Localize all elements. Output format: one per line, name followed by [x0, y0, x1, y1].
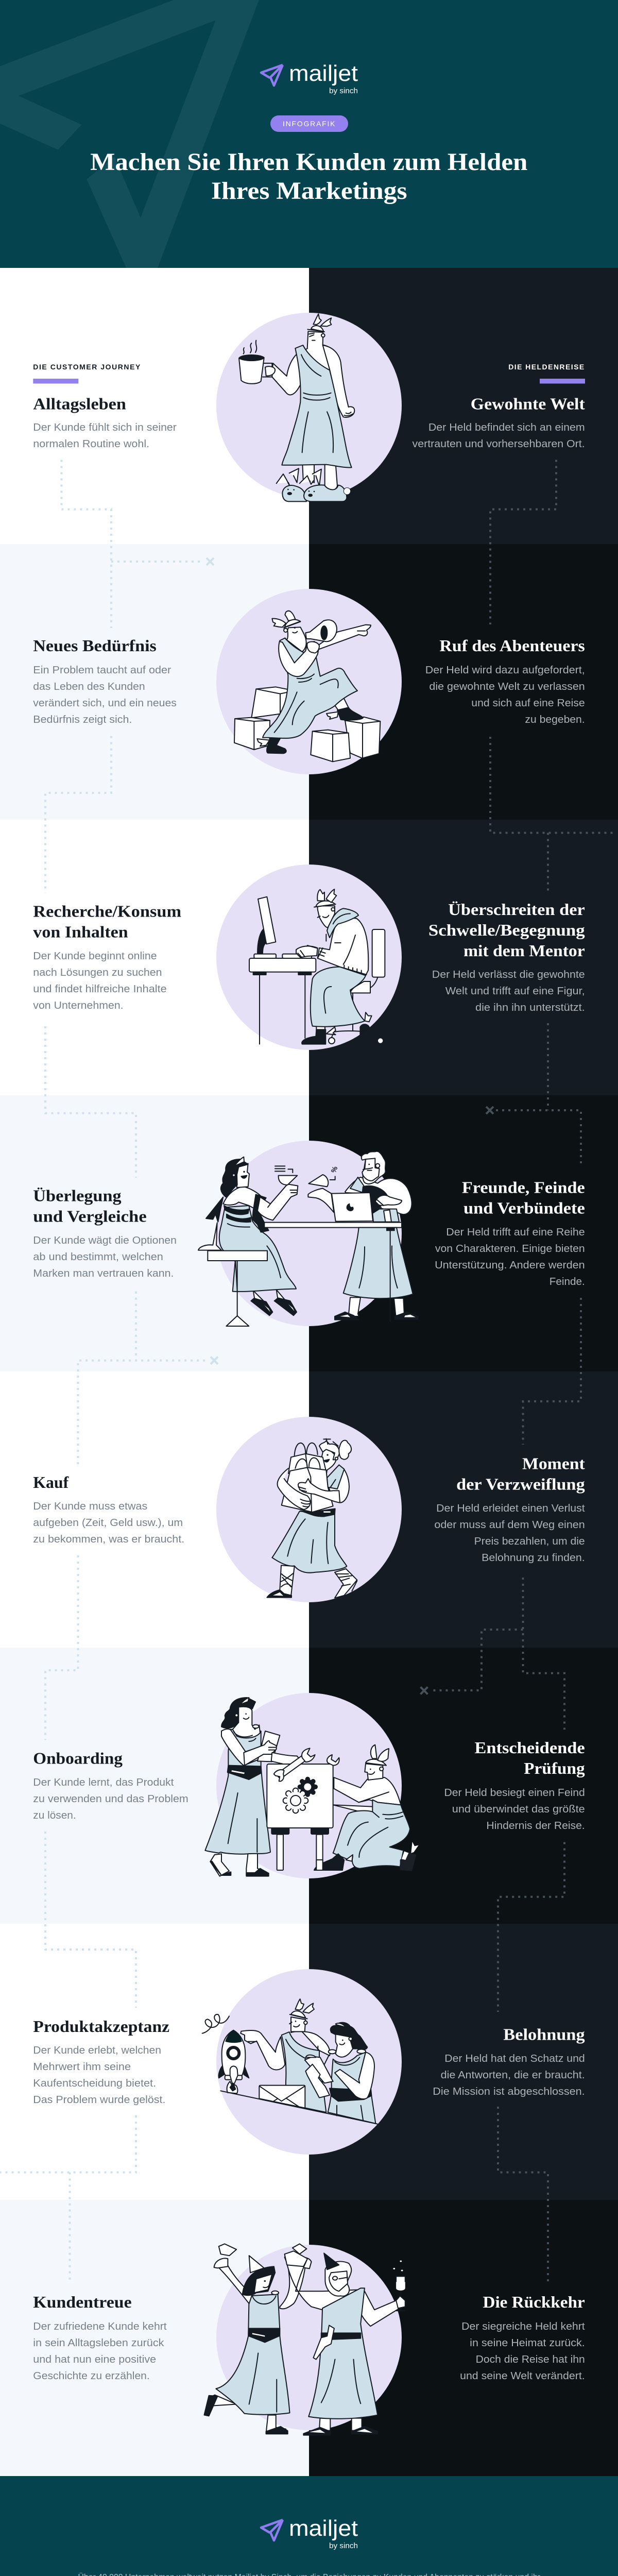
text: Produktakzeptanz: Mehrwert ihm seine [33, 2061, 131, 2073]
text: Überschreiten der Schwelle: Der Held verlässt die gewohnte [432, 969, 585, 980]
text: Ruf des Abenteuers [425, 636, 585, 725]
text: Die Rückkehr: Die Rückkehr [483, 2293, 585, 2311]
text: Neues Bedürfnis [33, 636, 177, 725]
text: Freunde, Feinde und Verbündete [435, 1178, 585, 1287]
text: Moment der Verzweiflung: der Verzweiflung [456, 1475, 585, 1493]
text: Überschreiten der Schwelle [428, 900, 585, 1013]
title: Machen Sie Ihren Kunden zum Helden [90, 148, 527, 176]
text: Produktakzeptanz: Produktakzeptanz [33, 2017, 169, 2036]
footer logo: mailjet [289, 2516, 358, 2541]
column label and accent bar: customer journey [33, 363, 141, 383]
text: Onboarding: zu verwenden und das Problem [33, 1793, 188, 1805]
icon: rocket [219, 2030, 249, 2093]
icon: wrench [274, 1748, 315, 1781]
text: Die Rückkehr: und seine Welt verändert. [460, 2370, 585, 2382]
text: Belohnung: Die Mission ist abgeschlossen. [433, 2086, 585, 2097]
dotted journey path: customer side [0, 460, 218, 2280]
text: Überlegung und Vergleiche: ab und bestimmt, welchen [33, 1251, 163, 1263]
text: Onboarding: Onboarding [33, 1749, 123, 1767]
footer panel [0, 2476, 618, 2576]
text: Freunde, Feinde und Verbündete: und Verbündete [464, 1198, 585, 1217]
text: Die Rückkehr: Doch die Reise hat ihn [476, 2354, 585, 2365]
text: Überlegung und Vergleiche: Der Kunde wägt die Optionen [33, 1235, 177, 1246]
text: Gewohnte Welt: Der Held befindet sich an einem [428, 422, 585, 433]
text: Recherche/Konsum von Inhalten: nach Lösungen zu suchen [33, 967, 162, 978]
text: Freunde, Feinde und Verbündete: von Charakteren. Einige bieten [435, 1243, 585, 1255]
text: Moment der Verzweiflung: Preis bezahlen, um die [474, 1536, 585, 1547]
text: Überschreiten der Schwelle: Schwelle/Begegnung [428, 921, 585, 939]
text: Ruf des Abenteuers: Ruf des Abenteuers [439, 636, 585, 655]
text: Recherche/Konsum von Inhalten: Der Kunde beginnt online [33, 951, 157, 962]
text: Neues Bedürfnis: Bedürfnis zeigt sich. [33, 714, 132, 725]
illustration: customer and hero fixing a machine [205, 1698, 419, 1876]
text: Überlegung und Vergleiche [33, 1186, 177, 1279]
text: Moment der Verzweiflung: Moment [522, 1454, 585, 1472]
header panel [0, 0, 618, 268]
text: Überlegung und Vergleiche: und Vergleiche [33, 1207, 147, 1225]
footer logo [261, 2516, 358, 2550]
text: Moment der Verzweiflung [434, 1454, 585, 1564]
icon: envelope [259, 2086, 305, 2108]
text: Überlegung und Vergleiche: Marken man vertrauen kann. [33, 1268, 174, 1279]
icon: squiggle [202, 2014, 229, 2033]
text: Ruf des Abenteuers: zu begeben. [525, 714, 585, 725]
illustration: customer and hero with rocket and envelope [202, 1999, 377, 2124]
text: Belohnung: Der Held hat den Schatz und [444, 2053, 585, 2064]
illustration: customer carrying shopping bags [267, 1439, 357, 1598]
decorative paper plane background [0, 0, 259, 268]
text: Recherche/Konsum von Inhalten [33, 902, 181, 1011]
panel: step 1 Alltagsleben / Gewohnte Welt [33, 363, 585, 450]
text: Freunde, Feinde und Verbündete: Der Held trifft auf eine Reihe [446, 1227, 585, 1238]
text: Entscheidende Prüfung: Prüfung [524, 1759, 585, 1777]
text: Entscheidende Prüfung: Der Held besiegt einen Feind [444, 1787, 585, 1799]
text: Überschreiten der Schwelle: die ihn ihn unterstützt. [475, 1002, 585, 1013]
text: Kauf [33, 1473, 184, 1545]
logo: mailjet by sinch: by sinch [329, 87, 358, 95]
circle backdrops [216, 313, 402, 2430]
title [90, 148, 527, 205]
text: Moment der Verzweiflung: Belohnung zu finden. [482, 1552, 585, 1564]
text: Recherche/Konsum von Inhalten: von Unternehmen. [33, 1000, 124, 1011]
text: Onboarding: zu lösen. [33, 1810, 76, 1821]
text: Belohnung: die Antworten, die er braucht. [441, 2070, 585, 2081]
title: Ihres Marketings [211, 177, 407, 205]
text: Alltagsleben: Alltagsleben [33, 395, 126, 413]
text: Freunde, Feinde und Verbündete: Unterstützung. Andere werden [435, 1260, 585, 1271]
text: Entscheidende Prüfung: und überwindet das größte [452, 1804, 585, 1815]
text: Recherche/Konsum von Inhalten: und findet hilfreiche Inhalte [33, 984, 167, 995]
text: Alltagsleben: normalen Routine wohl. [33, 438, 149, 450]
text: Neues Bedürfnis: Neues Bedürfnis [33, 636, 157, 655]
column label and accent bar: customer journey: DIE CUSTOMER JOURNEY [33, 363, 141, 371]
text: Produktakzeptanz: Das Problem wurde gelöst. [33, 2094, 165, 2106]
text: Kundentreue: Geschichte zu erzählen. [33, 2370, 150, 2382]
text: Produktakzeptanz [33, 2017, 169, 2106]
text: Recherche/Konsum von Inhalten: Recherche/Konsum [33, 902, 181, 920]
text: Produktakzeptanz: Kaufentscheidung bietet. [33, 2078, 156, 2089]
text: Entscheidende Prüfung: Entscheidende [474, 1738, 585, 1757]
text: Kauf: Der Kunde muss etwas [33, 1501, 147, 1512]
text: Freunde, Feinde und Verbündete: Feinde. [550, 1276, 585, 1287]
text: Kundentreue: Kundentreue [33, 2293, 132, 2311]
woman [204, 2244, 312, 2434]
text: Moment der Verzweiflung: Der Held erleidet einen Verlust [436, 1503, 585, 1514]
text: Onboarding [33, 1749, 188, 1821]
illustration: hero with megaphone on boxes [234, 611, 380, 761]
footer logo: by sinch [329, 2541, 358, 2550]
text: Alltagsleben: Der Kunde fühlt sich in seiner [33, 422, 177, 433]
text: Die Rückkehr [460, 2293, 585, 2382]
text: Ruf des Abenteuers: und sich auf eine Reise [471, 698, 585, 709]
column label and accent bar: hero's journey [508, 363, 585, 383]
logo: mailjet by sinch: mailjet [289, 61, 358, 86]
illustration: customer and hero at a bar table with laptop: % [329, 1165, 339, 1174]
text: Die Rückkehr: Der siegreiche Held kehrt [461, 2321, 585, 2332]
text: Belohnung [433, 2025, 585, 2097]
text: Kundentreue: und hat nun eine positive [33, 2354, 156, 2365]
text: Überschreiten der Schwelle: mit dem Mentor [464, 941, 585, 960]
text: Ruf des Abenteuers: Der Held wird dazu aufgefordert, [425, 665, 585, 676]
badge: Infografik [270, 115, 348, 132]
text: Produktakzeptanz: Der Kunde erlebt, welchen [33, 2045, 161, 2056]
text: Kundentreue: in sein Alltagsleben zurück [33, 2337, 164, 2349]
icon: gears [283, 1777, 318, 1813]
text: Neues Bedürfnis: das Leben des Kunden [33, 681, 145, 692]
text: Gewohnte Welt: Gewohnte Welt [471, 395, 585, 413]
text: Kauf: Kauf [33, 1473, 69, 1492]
text: Entscheidende Prüfung [444, 1738, 585, 1832]
illustration: hero with coffee cup and bunny slippers [239, 314, 354, 501]
text: Freunde, Feinde und Verbündete: Freunde, Feinde [462, 1178, 585, 1196]
dotted journey path: hero side [420, 460, 613, 2282]
illustration: customer and hero celebrating [204, 2244, 405, 2435]
text: Neues Bedürfnis: verändert sich, und ein neues [33, 698, 177, 709]
text: Gewohnte Welt: vertrauten und vorhersehbaren Ort. [412, 438, 585, 450]
illustration: customer and hero at a bar table with laptop [198, 1151, 418, 1326]
text: Kundentreue: Der zufriedene Kunde kehrt [33, 2321, 167, 2332]
text: Überschreiten der Schwelle: Überschreiten der [448, 900, 585, 919]
text: Kundentreue [33, 2293, 167, 2382]
text: Überschreiten der Schwelle: Welt und trifft auf eine Figur, [445, 986, 585, 997]
illustration: hero typing at a desk [249, 889, 385, 1044]
text: Gewohnte Welt [412, 395, 585, 450]
column label and accent bar: hero's journey: DIE HELDENREISE [508, 363, 584, 371]
badge: Infografik: INFOGRAFIK [283, 120, 335, 128]
text: Neues Bedürfnis: Ein Problem taucht auf oder [33, 665, 171, 676]
text: Kauf: aufgeben (Zeit, Geld usw.), um [33, 1517, 183, 1529]
text: Entscheidende Prüfung: Hindernis der Reise. [486, 1820, 585, 1832]
text: Belohnung: Belohnung [503, 2025, 585, 2043]
text: Alltagsleben [33, 395, 177, 450]
text: Ruf des Abenteuers: die gewohnte Welt zu verlassen [429, 681, 585, 692]
man [285, 2251, 405, 2435]
text: Überlegung und Vergleiche: Überlegung [33, 1186, 122, 1205]
text: Kauf: zu bekommen, was er braucht. [33, 1534, 184, 1545]
text: Die Rückkehr: in seine Heimat zurück. [470, 2337, 585, 2349]
logo: mailjet by sinch [261, 61, 358, 95]
text: Recherche/Konsum von Inhalten: von Inhalten [33, 922, 128, 941]
text: Moment der Verzweiflung: oder muss auf dem Weg einen [434, 1519, 585, 1531]
text: Onboarding: Der Kunde lernt, das Produkt [33, 1777, 174, 1788]
